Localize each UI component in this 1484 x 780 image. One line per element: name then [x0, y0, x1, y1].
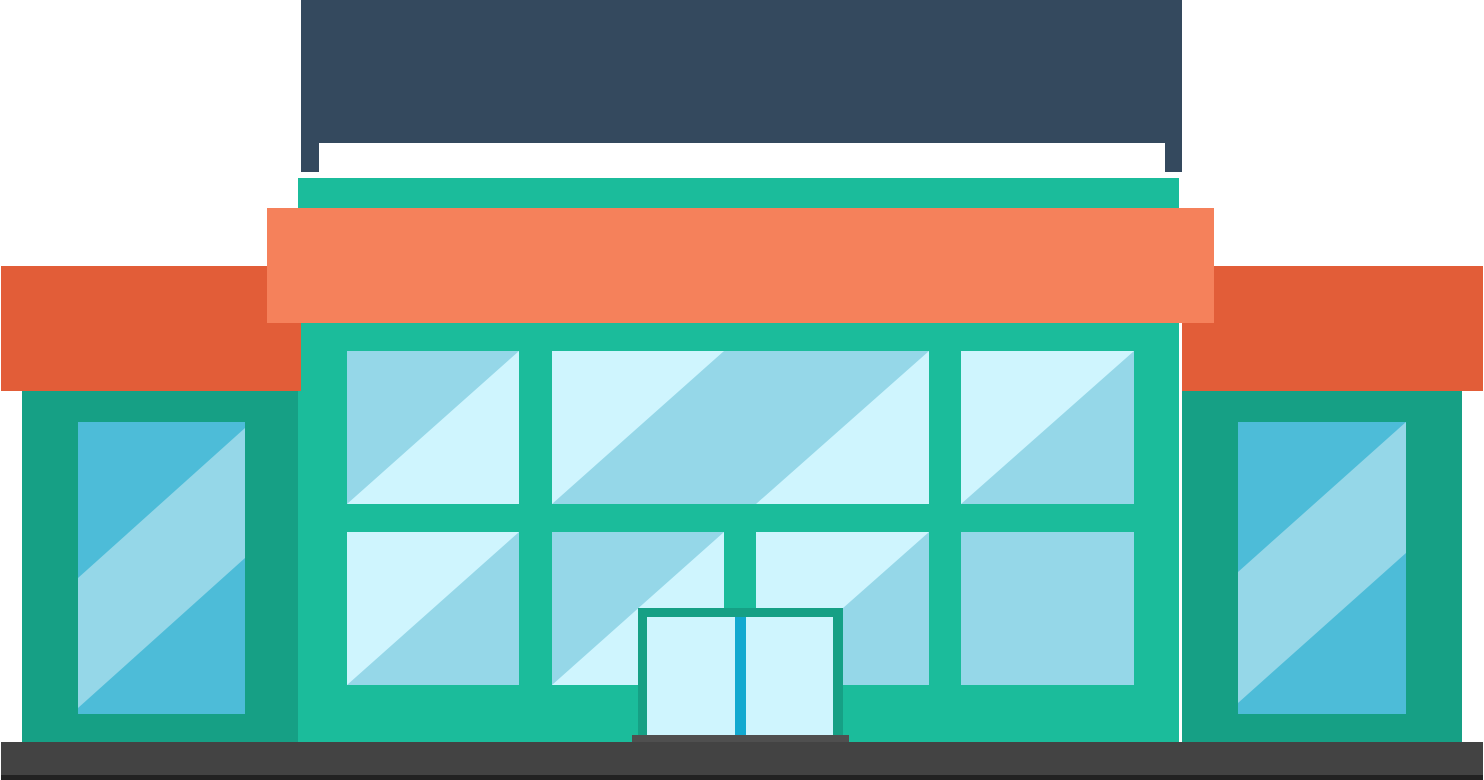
sign board: [301, 0, 1182, 172]
door step: [632, 735, 849, 742]
window: top left: [347, 351, 519, 504]
window: top right: [961, 351, 1134, 504]
window: bottom right: [961, 532, 1134, 685]
ground: [1, 742, 1483, 780]
window: bottom left: [347, 532, 519, 685]
entrance door: [638, 608, 843, 735]
window: bottom centre right: [756, 532, 929, 685]
left wing: [1, 266, 301, 742]
window: top centre: [552, 351, 929, 504]
window: bottom centre left: [552, 532, 724, 685]
right wing: [1182, 266, 1483, 742]
awning: [267, 208, 1214, 323]
roof band: [298, 178, 1179, 208]
main building facade: [298, 323, 1179, 742]
